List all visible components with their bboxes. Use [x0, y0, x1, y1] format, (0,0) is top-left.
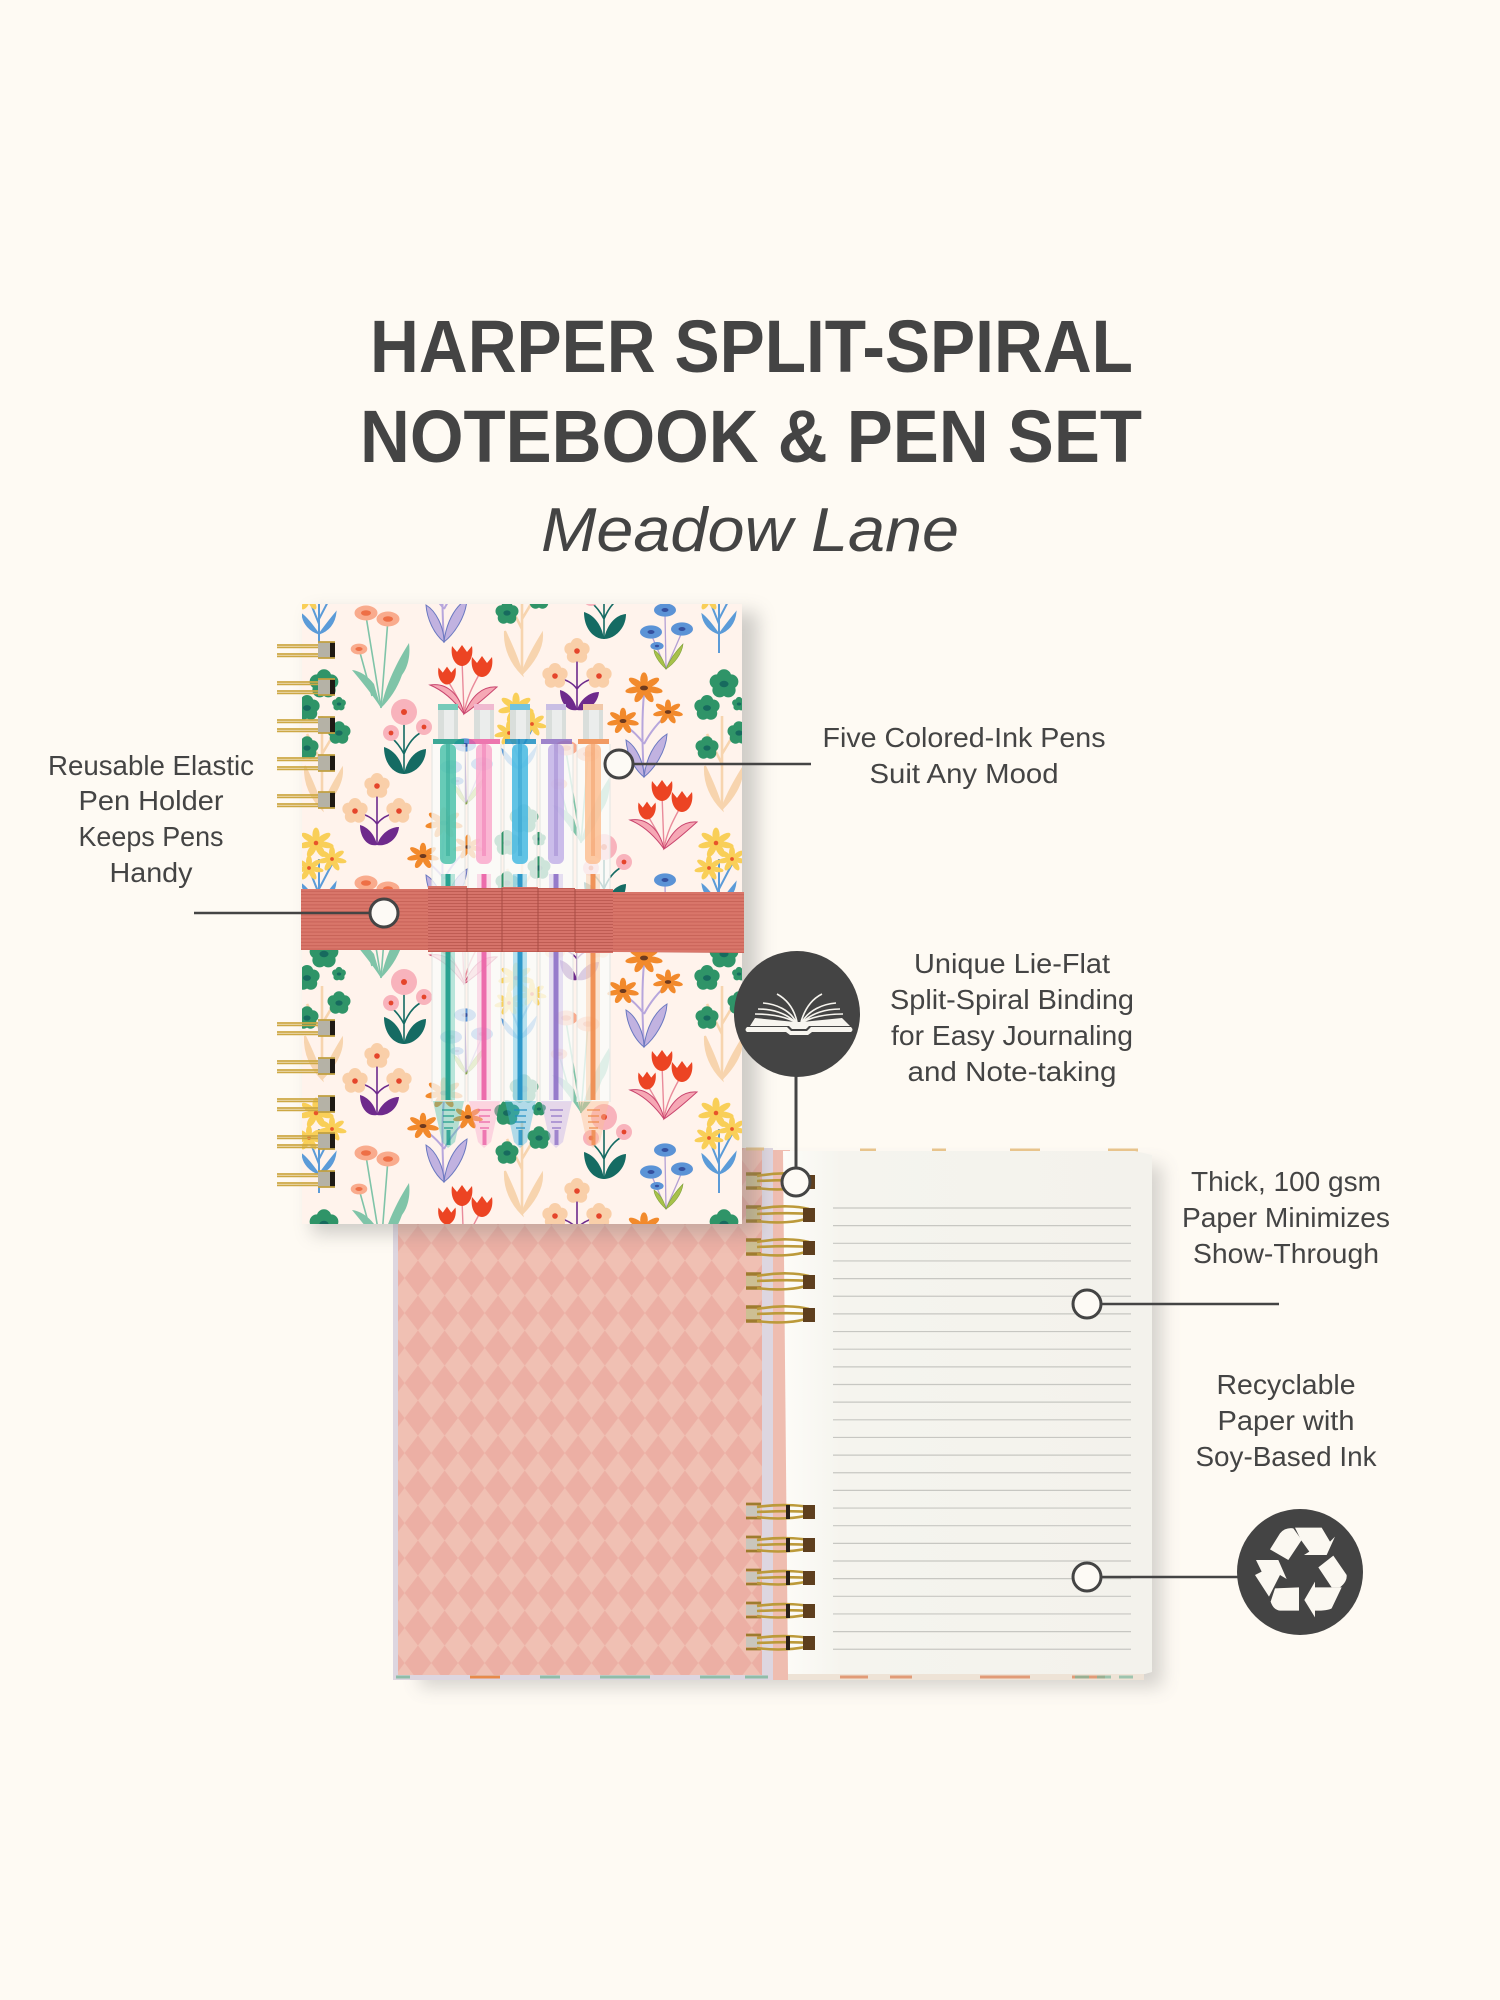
bottom spiral coils [277, 1020, 335, 1187]
label: Thick, 100 gsm [1191, 1166, 1381, 1197]
five pens [432, 704, 610, 1148]
leader [794, 1075, 798, 1168]
label: Paper with [1218, 1405, 1354, 1436]
callout: binding [734, 948, 1134, 1196]
label: Show-Through [1193, 1238, 1379, 1269]
top edge of pages block [746, 1149, 1138, 1150]
bottom edge of pages block [788, 1668, 1144, 1680]
shadow under open notebook [420, 1165, 1162, 1687]
leader [1101, 1303, 1279, 1305]
label: for Easy Journaling [891, 1020, 1133, 1051]
blue pen [504, 704, 537, 1148]
back cover interior [393, 1148, 773, 1680]
open notebook [393, 1148, 1162, 1687]
orange pen [577, 704, 610, 1148]
teal pen [432, 704, 465, 1148]
label: Five Colored-Ink Pens [822, 722, 1106, 753]
lavender pen [540, 704, 573, 1148]
lower spiral coils [746, 1504, 815, 1650]
dot [370, 899, 398, 927]
subtitle: Meadow Lane [541, 496, 959, 565]
leader [633, 763, 811, 765]
label: Unique Lie-Flat [914, 948, 1110, 979]
ruled lines [833, 1208, 1131, 1649]
label: Keeps Pens [78, 821, 224, 852]
pink pen [468, 704, 501, 1148]
label [822, 722, 1106, 789]
label: Split-Spiral Binding [890, 984, 1134, 1015]
dot [1073, 1290, 1101, 1318]
label: Pen Holder [78, 785, 224, 816]
floral cover [302, 604, 742, 1224]
leader [194, 912, 370, 914]
icon: open book [734, 951, 860, 1077]
top spiral coils [277, 642, 335, 808]
dot [605, 750, 633, 778]
label: Paper Minimizes [1182, 1202, 1390, 1233]
label [1182, 1166, 1390, 1269]
callout: pens [605, 722, 1106, 789]
label: Handy [110, 857, 192, 888]
callout: paper [1073, 1166, 1390, 1318]
inner front strip [773, 1150, 790, 1680]
upper spiral coils [746, 1173, 815, 1322]
label: Reusable Elastic [48, 750, 254, 781]
label [1196, 1369, 1377, 1472]
ruled page [783, 1151, 1152, 1674]
title: NOTEBOOK & PEN SET [360, 395, 1142, 478]
label: Recyclable [1216, 1369, 1356, 1400]
cover shadow [312, 612, 758, 1234]
label: and Note-taking [908, 1056, 1116, 1087]
callout: elastic pen holder [48, 750, 398, 927]
icon: recycle [1237, 1509, 1363, 1635]
label [890, 948, 1134, 1087]
closed notebook [277, 604, 766, 1242]
elastic band [301, 886, 744, 953]
callout: recyclable [1073, 1369, 1377, 1635]
leader [1101, 1576, 1240, 1578]
dot [782, 1168, 810, 1196]
label [48, 750, 254, 888]
title [360, 305, 1142, 478]
label: Suit Any Mood [870, 758, 1058, 789]
dot [1073, 1563, 1101, 1591]
label: Soy-Based Ink [1196, 1441, 1377, 1472]
title: HARPER SPLIT-SPIRAL [370, 305, 1133, 388]
